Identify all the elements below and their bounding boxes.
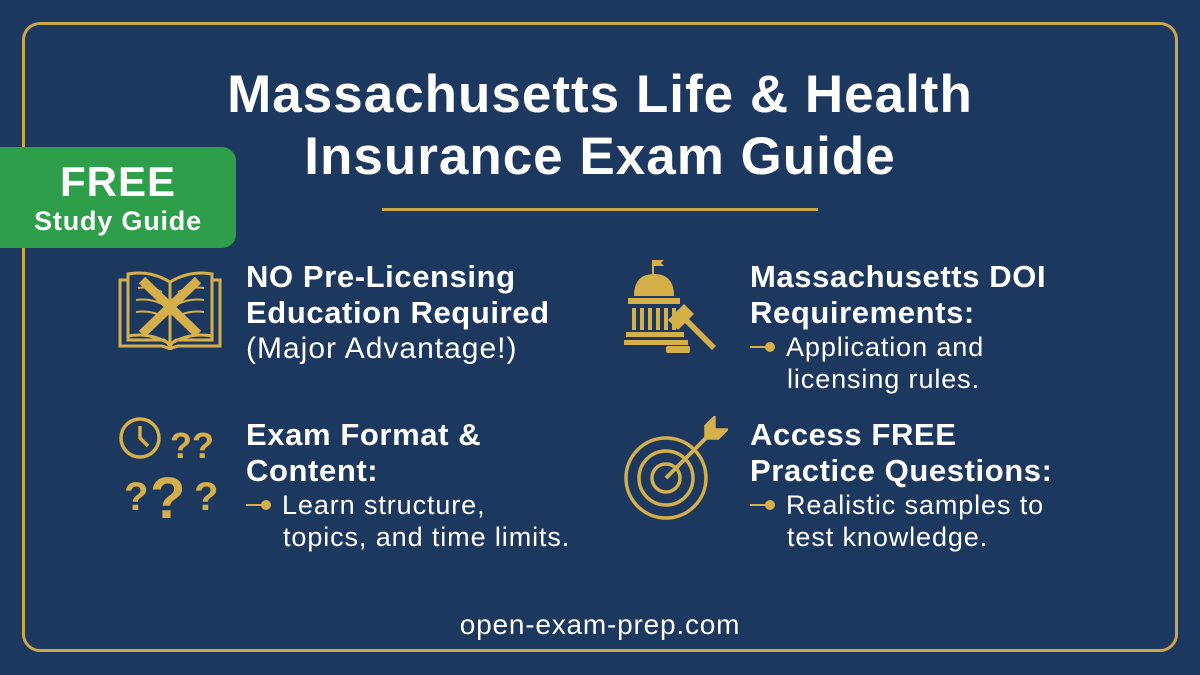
icon: book with X [118, 272, 222, 350]
item: exam format: Learn structure, [282, 490, 486, 520]
icon: clock with question marks [119, 417, 218, 524]
badge: free study guide: Study Guide [34, 206, 202, 236]
badge: free study guide: FREE [60, 158, 176, 205]
item: practice questions: test knowledge. [787, 522, 988, 552]
icon: capitol with gavel [624, 260, 716, 353]
icon: target with arrow [624, 416, 728, 520]
footer url: open-exam-prep.com [460, 609, 740, 640]
icon: clock with question marks: ?? [170, 425, 214, 466]
icon: clock with question marks: ? [194, 475, 218, 519]
item: no pre-licensing [246, 259, 550, 365]
item: DOI requirements: Massachusetts DOI [750, 259, 1046, 294]
item: exam format: Content: [246, 453, 378, 488]
item: DOI requirements: Application and [786, 332, 984, 362]
item: exam format: topics, and time limits. [283, 522, 570, 552]
title underline [382, 208, 818, 211]
item: DOI requirements: licensing rules. [787, 364, 980, 394]
item: DOI requirements: Requirements: [750, 295, 975, 330]
title [227, 65, 973, 186]
item: no pre-licensing: (Major Advantage!) [246, 332, 517, 365]
item: practice questions: Practice Questions: [750, 453, 1053, 488]
title: Massachusetts Life & Health [227, 65, 973, 124]
item: practice questions: Realistic samples to [786, 490, 1044, 520]
item: practice questions [750, 417, 1053, 552]
badge: free study guide [0, 147, 236, 248]
item: no pre-licensing: Education Required [246, 295, 550, 330]
item: practice questions: Access FREE [750, 417, 956, 452]
title: Insurance Exam Guide [304, 127, 896, 186]
item: DOI requirements [750, 259, 1046, 394]
icon: clock with question marks: ? [124, 475, 148, 519]
item: no pre-licensing: NO Pre-Licensing [246, 259, 516, 294]
item: exam format: Exam Format & [246, 417, 481, 452]
item: exam format [246, 417, 570, 552]
